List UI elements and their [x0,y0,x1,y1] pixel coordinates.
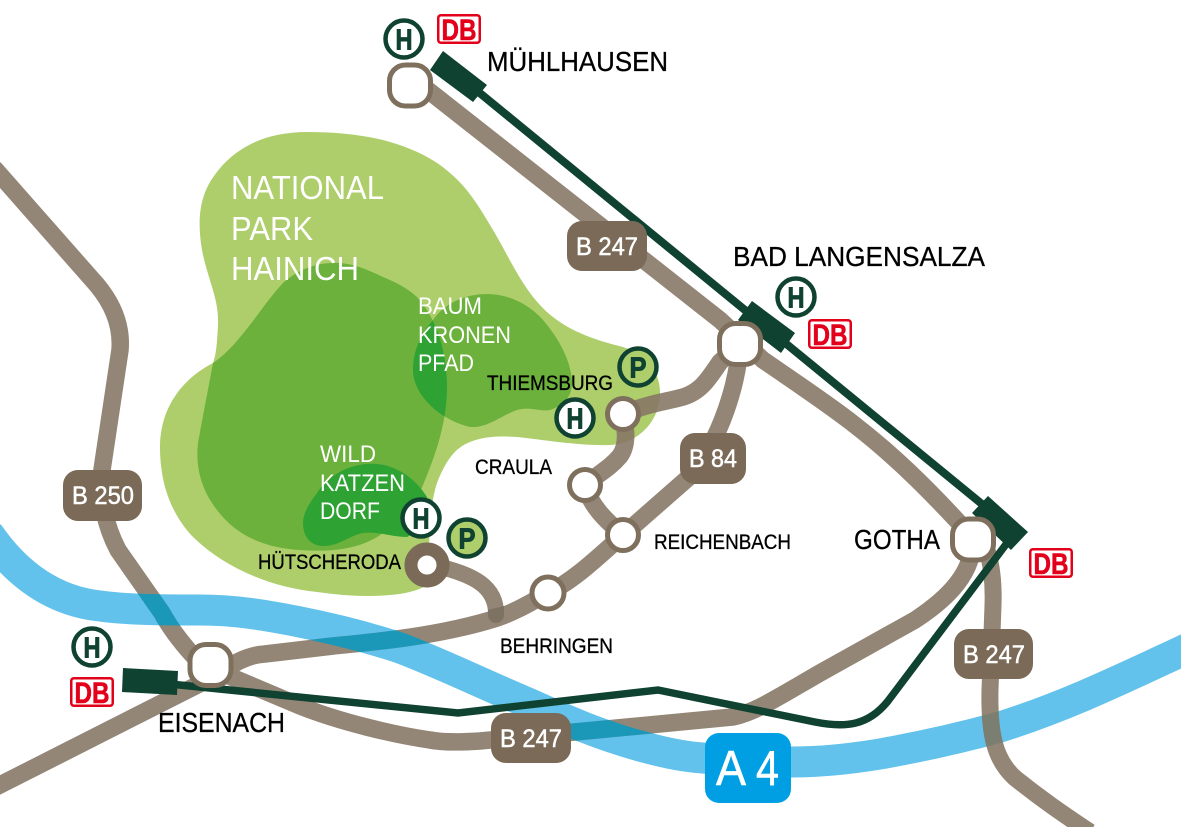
treetop path area [413,294,572,427]
icon: parking Hütscheroda: P [458,524,476,556]
heading: National Park Hainich: NATIONAL [231,169,384,206]
label: Wildkatzendorf: WILD [320,441,376,468]
badge: B 84 [680,433,746,484]
icon: bus stop Mühlhausen: H [396,24,412,56]
wildcat village area [303,464,427,546]
badge: B 247 north [567,221,647,271]
heading: National Park Hainich [231,169,384,287]
icon: bus stop Mühlhausen [386,20,422,58]
stop Reichenbach [608,520,638,550]
heading: National Park Hainich: PARK [231,210,313,247]
icon: parking Thiemsburg: P [630,352,646,384]
icon: bus stop Bad Langensalza [778,278,814,316]
badge: B 250 [63,470,142,521]
label: Bad Langensalza: BAD LANGENSALZA [733,241,985,272]
icon: bus stop Eisenach: H [84,632,100,664]
label: Gotha: GOTHA [854,524,940,555]
label: Baumkronenpfad: BAUM [418,293,482,320]
icon: DB logo Mühlhausen: DB [442,14,476,47]
badge: A 4 motorway: 4 [756,742,779,796]
icon: DB logo Gotha: DB [1034,548,1068,581]
icon: bus stop Eisenach [74,628,110,666]
junction Eisenach [190,644,231,686]
icon: bus stop Thiemsburg [556,400,594,436]
station block Bad Langensalza [738,301,795,353]
icon: bus stop Thiemsburg: H [566,404,584,436]
station block Gotha [972,496,1028,550]
badge: B 247 east [954,629,1033,679]
badge: A 4 motorway [705,733,791,803]
label: Eisenach: EISENACH [158,707,285,738]
station block Eisenach [122,668,178,695]
badge: B 247 south [491,713,571,763]
icon: DB logo Eisenach: DB [74,677,110,710]
heading: National Park Hainich: HAINICH [231,250,359,287]
badge: B 247 south: B 247 [500,725,562,753]
national park area [160,132,660,596]
river / motorway A4 band [0,533,1181,762]
junction Mühlhausen [390,65,430,106]
railway line [150,85,1010,725]
label: Thiemsburg: THIEMSBURG [487,372,613,395]
stop Behringen [532,577,564,609]
icon: bus stop Hütscheroda: H [412,504,430,536]
badge: B 84: B 84 [689,445,737,473]
icon: DB logo Bad Langensalza: DB [812,319,848,352]
label: Baumkronenpfad: PFAD [418,350,474,377]
icon: parking Hütscheroda [448,520,486,556]
icon: parking Thiemsburg [620,348,656,386]
junction Bad Langensalza [720,324,760,364]
station block Mühlhausen [430,51,487,102]
label: Baumkronenpfad [418,293,511,377]
icon: bus stop Hütscheroda [402,500,440,536]
label: Hütscheroda: HÜTSCHERODA [258,551,401,574]
badge: B 247 east: B 247 [963,641,1025,669]
junction Gotha [952,519,994,560]
label: Wildkatzendorf: KATZEN [320,470,405,497]
forest core area [197,263,447,551]
badge: A 4 motorway: A [716,742,746,796]
label: Reichenbach: REICHENBACH [654,531,791,554]
stop Thiemsburg [608,398,638,430]
icon: bus stop Bad Langensalza: H [788,282,804,314]
label: Wildkatzendorf: DORF [320,498,380,525]
badge: B 250: B 250 [72,482,134,510]
label: Mühlhausen: MÜHLHAUSEN [487,46,668,77]
label: Behringen: BEHRINGEN [500,635,613,658]
label: Baumkronenpfad: KRONEN [418,322,511,349]
label: Wildkatzendorf [320,441,405,525]
label: Craula: CRAULA [475,456,552,479]
stop Hütscheroda [411,549,443,581]
stop Craula [570,470,600,500]
badge: B 247 north: B 247 [576,233,638,261]
